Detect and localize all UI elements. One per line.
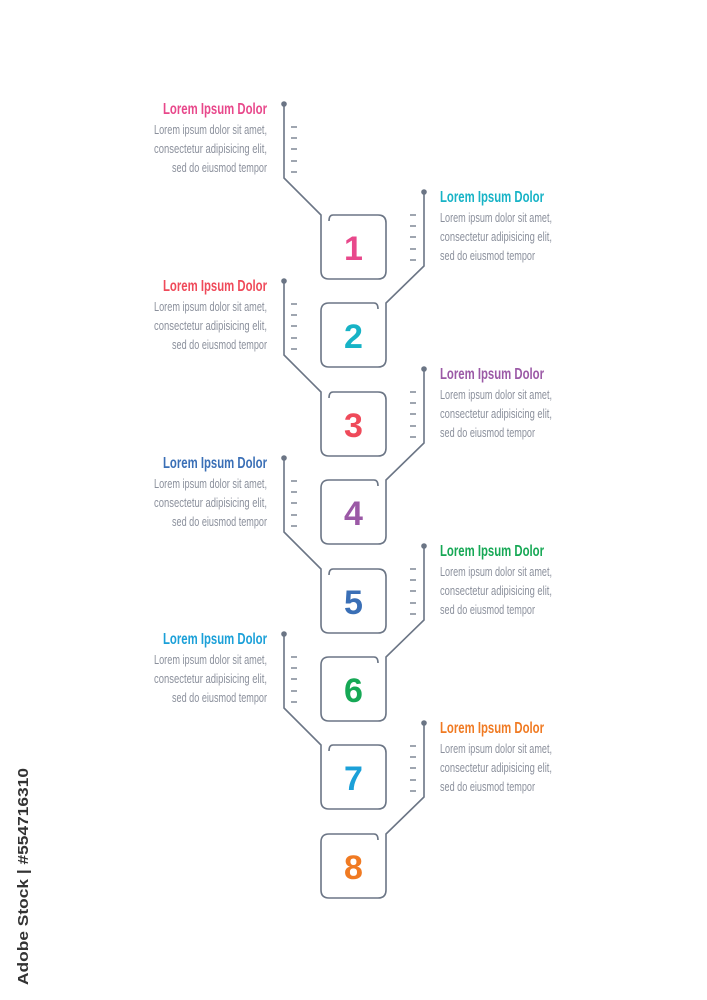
number 1: 1 [344, 230, 363, 268]
text block 1: consectetur adipisicing elit, [154, 141, 267, 156]
text block 3: sed do eiusmod tempor [172, 337, 268, 352]
step 5 [154, 455, 386, 633]
watermark id: Adobe Stock | #554716310 [15, 768, 32, 985]
text block 3: Lorem ipsum dolor sit amet, [154, 299, 267, 314]
text block 5: Lorem Ipsum Dolor [163, 455, 267, 472]
text block 6: sed do eiusmod tempor [440, 602, 536, 617]
step 6 [321, 543, 552, 721]
connector and box 1 [284, 104, 386, 279]
text block 4: consectetur adipisicing elit, [440, 406, 552, 421]
text block 6: Lorem Ipsum Dolor [440, 543, 544, 560]
step 8 [321, 720, 552, 898]
text block 3: consectetur adipisicing elit, [154, 318, 267, 333]
text block 5: sed do eiusmod tempor [172, 514, 268, 529]
text block 4: Lorem ipsum dolor sit amet, [440, 387, 552, 402]
text block 2: Lorem Ipsum Dolor [440, 189, 544, 206]
text block 8: consectetur adipisicing elit, [440, 760, 552, 775]
text block 8: Lorem ipsum dolor sit amet, [440, 741, 552, 756]
text block 5: Lorem ipsum dolor sit amet, [154, 476, 267, 491]
text block 4: Lorem Ipsum Dolor [440, 366, 544, 383]
text block 8: Lorem Ipsum Dolor [440, 720, 544, 737]
text block 7: Lorem ipsum dolor sit amet, [154, 652, 267, 667]
step 3 [154, 278, 386, 456]
text block 7: sed do eiusmod tempor [172, 690, 268, 705]
text block 6: Lorem ipsum dolor sit amet, [440, 564, 552, 579]
text block 1: Lorem Ipsum Dolor [163, 101, 267, 118]
text block 2 [440, 189, 552, 263]
number 6: 6 [344, 672, 363, 710]
text block 1 [154, 101, 268, 175]
text block 8 [440, 720, 552, 794]
text block 7 [154, 631, 268, 705]
text block 4 [440, 366, 552, 440]
text block 3 [154, 278, 268, 352]
text block 1: sed do eiusmod tempor [172, 160, 268, 175]
number 8: 8 [344, 849, 363, 887]
text block 4: sed do eiusmod tempor [440, 425, 536, 440]
number 5: 5 [344, 584, 363, 622]
text block 3: Lorem Ipsum Dolor [163, 278, 267, 295]
text block 7: Lorem Ipsum Dolor [163, 631, 267, 648]
text block 8: sed do eiusmod tempor [440, 779, 536, 794]
number 4: 4 [344, 495, 363, 533]
step 1 [154, 101, 386, 279]
text block 6: consectetur adipisicing elit, [440, 583, 552, 598]
number 7: 7 [344, 760, 363, 798]
text block 7: consectetur adipisicing elit, [154, 671, 267, 686]
text block 1: Lorem ipsum dolor sit amet, [154, 122, 267, 137]
number 2: 2 [344, 318, 363, 356]
text block 2: consectetur adipisicing elit, [440, 229, 552, 244]
text block 5: consectetur adipisicing elit, [154, 495, 267, 510]
number 3: 3 [344, 407, 363, 445]
text block 6 [440, 543, 552, 617]
text block 2: sed do eiusmod tempor [440, 248, 536, 263]
step 4 [321, 366, 552, 544]
text block 2: Lorem ipsum dolor sit amet, [440, 210, 552, 225]
step 2 [321, 189, 552, 367]
step 7 [154, 631, 386, 809]
text block 5 [154, 455, 268, 529]
